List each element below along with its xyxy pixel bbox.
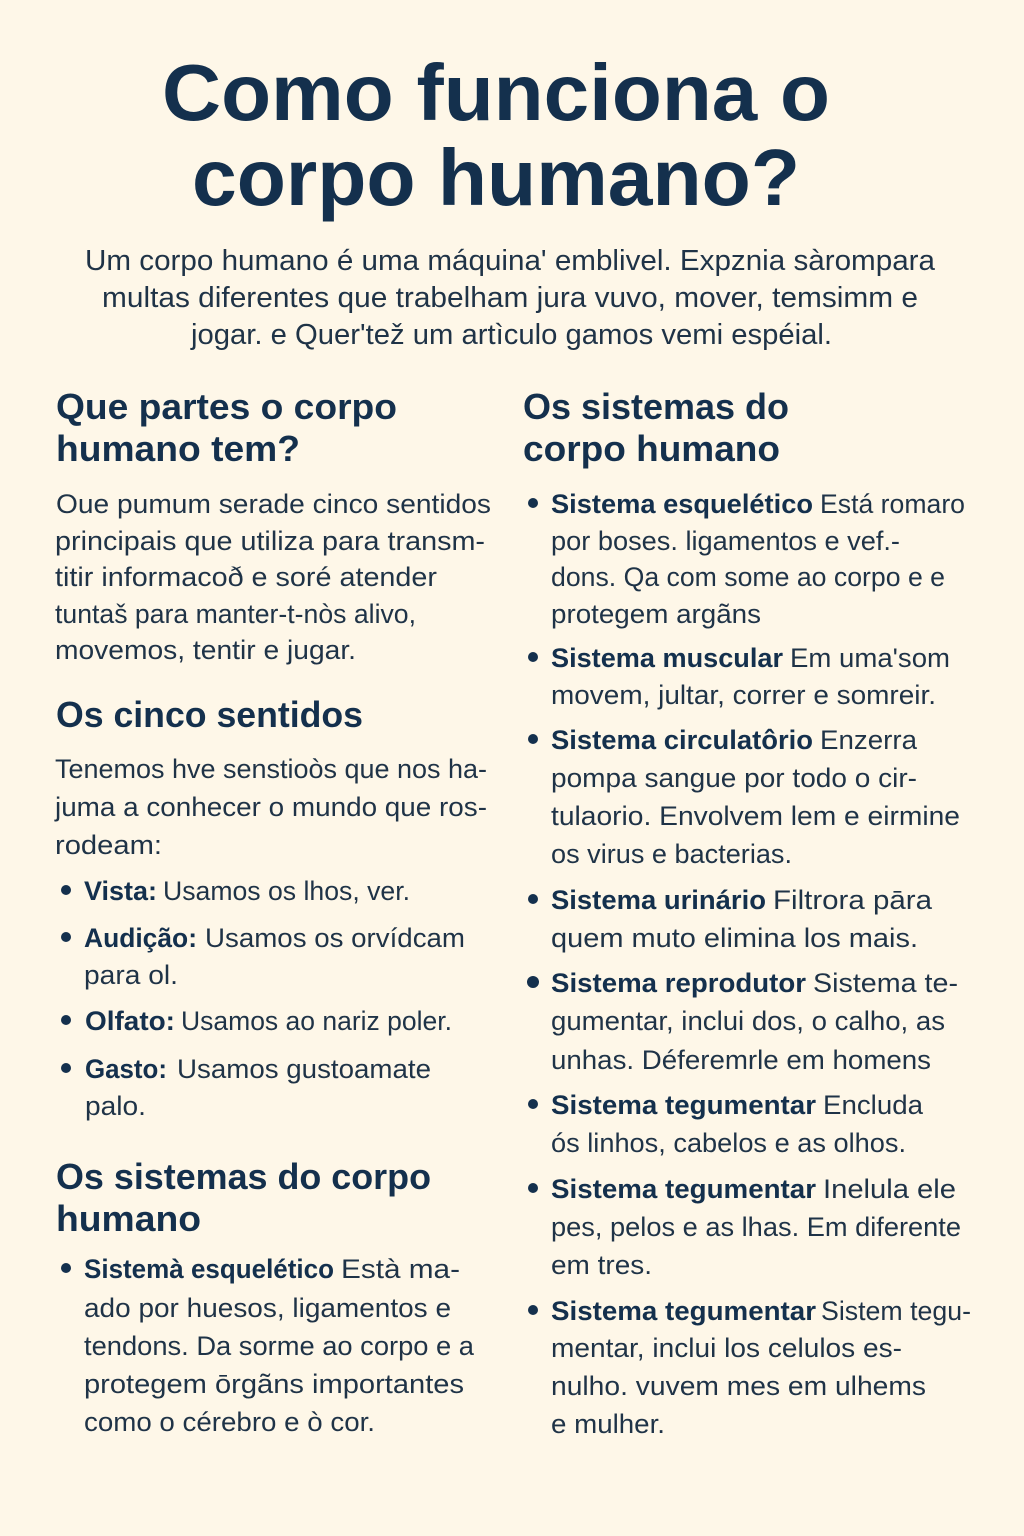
bullet: sistema tegumentar 3: nulho. vuvem mes em ulhems bbox=[551, 1371, 926, 1401]
bullet: sistema urinário: Filtrora pāra bbox=[773, 885, 933, 915]
heading: os sistemas do corpo humano: Os sistemas do corpo bbox=[56, 1156, 431, 1197]
bullet: sistema tegumentar 2: Sistema tegumentar bbox=[551, 1174, 816, 1204]
heading: os sistemas do corpo humano: Os sistemas do bbox=[523, 386, 789, 427]
bullet: sistema circulatório: Sistema circulatôrio bbox=[551, 725, 813, 755]
panel: left column bbox=[54, 386, 491, 1437]
bullet: vista: Vista: bbox=[84, 876, 157, 906]
bullet: sistema esquelético bbox=[61, 1254, 475, 1437]
bullet: sistema tegumentar 1 bbox=[528, 1090, 924, 1158]
text block: cinco sentidos intro: juma a conhecer o mundo que ros- bbox=[54, 792, 487, 822]
bullet: audição: Audição: bbox=[84, 923, 197, 953]
bullet: sistema esquelético: Està ma- bbox=[341, 1254, 460, 1284]
heading: os sistemas do corpo humano bbox=[56, 1156, 431, 1239]
panel: right column bbox=[523, 386, 971, 1439]
bullet: sistema esquelético: protegem argãns bbox=[551, 599, 761, 629]
bullet: sistema tegumentar 1: Sistema tegumentar bbox=[551, 1090, 816, 1120]
intro paragraph bbox=[85, 245, 936, 351]
bullet: sistema circulatório: pompa sangue por todo o cir- bbox=[551, 763, 917, 793]
text block: cinco sentidos intro: rodeam: bbox=[55, 830, 162, 860]
text block: cinco sentidos intro: Tenemos hve senstioòs que nos ha- bbox=[55, 754, 487, 784]
bullet: sistema tegumentar 3: Sistema tegumentar bbox=[551, 1296, 816, 1326]
title bbox=[162, 48, 830, 222]
heading: os cinco sentidos: Os cinco sentidos bbox=[56, 694, 363, 735]
bullet: sistema urinário: quem muto elimina los mais. bbox=[551, 923, 918, 953]
bullet: sistema esquelético: Sistemà esquelético bbox=[84, 1254, 334, 1284]
text block: que partes: movemos, tentir e jugar. bbox=[55, 635, 356, 665]
bullet: sistema reprodutor: Sistema te- bbox=[813, 968, 958, 998]
bullet: sistema tegumentar 1: Encluda bbox=[823, 1090, 924, 1120]
bullet: sistema esquelético: protegem ōrgãns importantes bbox=[84, 1369, 464, 1399]
bullet: sistema tegumentar 1: ós linhos, cabelos e as olhos. bbox=[551, 1128, 906, 1158]
intro paragraph: Um corpo humano é uma máquina' emblivel. Expznia sàrompara bbox=[85, 245, 936, 277]
bullet: sistema circulatório: os virus e bacterias. bbox=[551, 839, 792, 869]
bullet: vista: Usamos os lhos, ver. bbox=[163, 876, 410, 906]
text block: cinco sentidos intro bbox=[54, 754, 487, 860]
bullet: gasto: Usamos gustoamate bbox=[177, 1054, 431, 1084]
bullet: sistema muscular: movem, jultar, correr e somreir. bbox=[551, 680, 936, 710]
bullet: sistema esquelético: tendons. Da sorme ao corpo e a bbox=[84, 1331, 475, 1361]
bullet: audição bbox=[61, 923, 465, 990]
bullet: sistema circulatório: tulaorio. Envolvem lem e eirmine bbox=[551, 801, 960, 831]
heading: os sistemas do corpo humano bbox=[523, 386, 789, 469]
bullet: sistema tegumentar 3: e mulher. bbox=[551, 1409, 665, 1439]
bullet: sistema reprodutor: unhas. Déferemrle em homens bbox=[551, 1045, 931, 1075]
bullet: gasto bbox=[61, 1054, 431, 1121]
bullet: sistema reprodutor: gumentar, inclui dos, o calho, as bbox=[551, 1006, 945, 1036]
title: Como funciona o bbox=[162, 48, 830, 137]
bullet: sistema tegumentar 3: Sistem tegu- bbox=[821, 1296, 971, 1326]
text block: que partes: tuntaš para manter-t-nòs alivo, bbox=[55, 599, 416, 629]
heading: que partes bbox=[56, 386, 397, 469]
bullet: gasto: Gasto: bbox=[85, 1054, 167, 1084]
bullet: sistema reprodutor: Sistema reprodutor bbox=[551, 968, 806, 998]
bullet: sistema muscular: Sistema muscular bbox=[551, 643, 783, 673]
bullet: sistema esquelético: como o cérebro e ò cor. bbox=[84, 1407, 375, 1437]
bullet: sistema esquelético: por boses. ligamentos e vef.- bbox=[551, 526, 900, 556]
bullet: sistema muscular: Em uma'som bbox=[790, 643, 950, 673]
text block: que partes: Oue pumum serade cinco sentidos bbox=[56, 489, 491, 519]
bullet: sistema tegumentar 2: pes, pelos e as lhas. Em diferente bbox=[551, 1212, 961, 1242]
heading: que partes: humano tem? bbox=[56, 428, 300, 469]
bullet: sistema muscular bbox=[528, 643, 950, 710]
bullet: sistema urinário bbox=[528, 885, 933, 953]
heading: os sistemas do corpo humano: corpo humano bbox=[523, 428, 780, 469]
bullet: sistema esquelético: Sistema esquelético bbox=[551, 489, 813, 519]
bullet: olfato: Usamos ao nariz poler. bbox=[181, 1006, 452, 1036]
bullet: sistema esquelético: Está romaro bbox=[820, 489, 965, 519]
bullet: sistema tegumentar 2: em tres. bbox=[551, 1250, 652, 1280]
bullet: sistema urinário: Sistema urinário bbox=[551, 885, 766, 915]
text block: que partes: principais que utiliza para transm- bbox=[55, 526, 485, 556]
bullet: sistema esquelético bbox=[528, 489, 965, 629]
bullet: sistema reprodutor bbox=[527, 968, 958, 1075]
bullet: olfato: Olfato: bbox=[85, 1006, 175, 1036]
intro paragraph: jogar. e Quer'tež um artìculo gamos vemi espéial. bbox=[190, 319, 832, 351]
bullet: sistema esquelético: ado por huesos, ligamentos e bbox=[84, 1293, 451, 1323]
bullet: sistema tegumentar 3 bbox=[528, 1296, 971, 1439]
bullet: gasto: palo. bbox=[85, 1091, 146, 1121]
bullet: olfato bbox=[61, 1006, 452, 1036]
title: corpo humano? bbox=[192, 133, 800, 222]
bullet: sistema esquelético: dons. Qa com some ao corpo e e bbox=[551, 562, 945, 592]
bullet: sistema circulatório: Enzerra bbox=[820, 725, 918, 755]
heading: os sistemas do corpo humano: humano bbox=[56, 1198, 201, 1239]
bullet: audição: para ol. bbox=[84, 960, 178, 990]
bullet: sistema tegumentar 2: Inelula ele bbox=[823, 1174, 956, 1204]
bullet: sistema circulatório bbox=[528, 725, 960, 869]
bullet: sistema tegumentar 2 bbox=[528, 1174, 961, 1280]
heading: que partes: Que partes o corpo bbox=[56, 386, 397, 427]
bullet: audição: Usamos os orvídcam bbox=[205, 923, 465, 953]
text block: que partes bbox=[55, 489, 491, 665]
bullet: sistema tegumentar 3: mentar, inclui los celulos es- bbox=[551, 1333, 902, 1363]
intro paragraph: multas diferentes que trabelham jura vuvo, mover, temsimm e bbox=[102, 282, 918, 314]
text block: que partes: titir informacoð e soré atender bbox=[55, 562, 437, 592]
